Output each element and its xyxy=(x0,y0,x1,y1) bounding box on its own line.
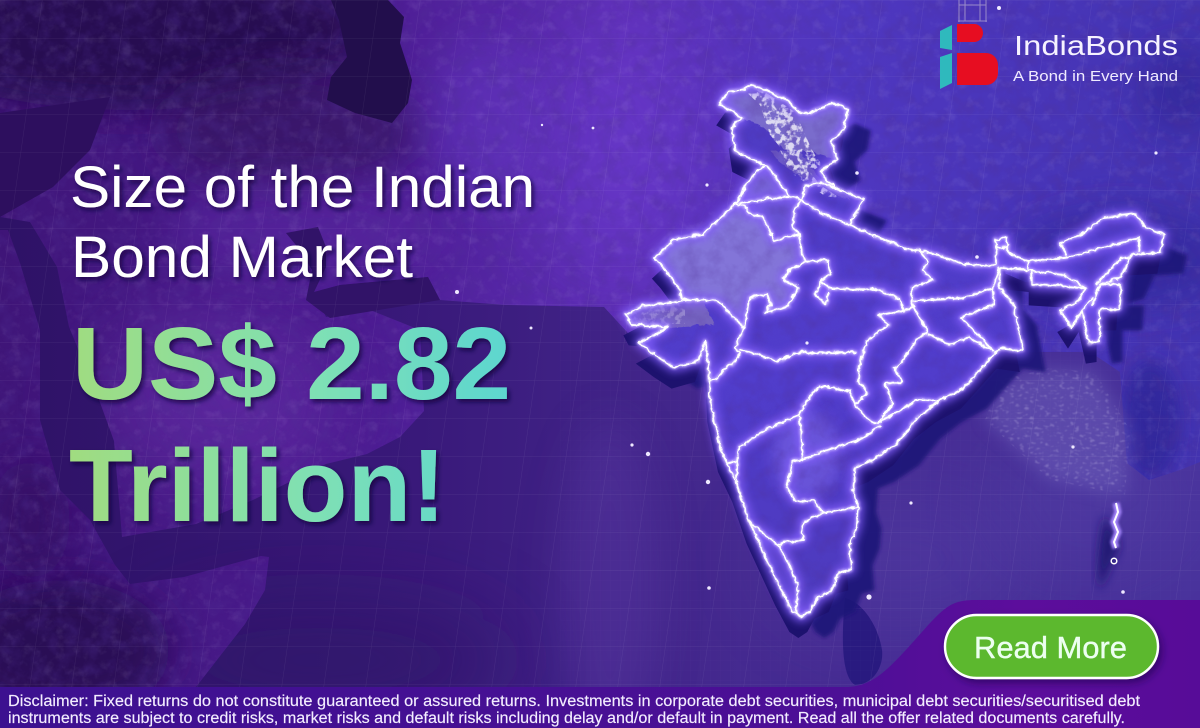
map: land texture xyxy=(632,88,1119,581)
map: India with glowing state borders xyxy=(620,80,1187,638)
map: wide border glow xyxy=(625,84,1163,616)
disclaimer text: Disclaimer: Fixed returns do not constitute guaranteed or assured returns. Investments in corporate debt securities, municipal debt securities/securitised debt xyxy=(8,693,1141,710)
disclaimer text xyxy=(8,693,1141,727)
map: southern plateau highlight xyxy=(772,410,840,497)
map: Kashmir light fill xyxy=(718,84,847,158)
headline figure: US$ 2.82 Trillion!: US$ 2.82 xyxy=(72,306,511,421)
background: Mediterranean Sea xyxy=(0,97,110,217)
background: Caspian Sea xyxy=(327,0,412,123)
map: India land fill xyxy=(625,84,1163,616)
button: Read More xyxy=(945,615,1158,678)
small drone outline above logo xyxy=(958,0,987,22)
background: ocean sheen rings xyxy=(130,420,1180,728)
background: Sri Lanka xyxy=(843,598,882,685)
map: Gujarat fill xyxy=(625,300,713,327)
headline figure: US$ 2.82 Trillion!: Trillion! xyxy=(69,428,446,543)
logo: IndiaBonds xyxy=(940,24,1178,89)
map: Himalaya snow fill xyxy=(770,150,849,198)
logo wordmark: IndiaBonds xyxy=(1014,30,1178,61)
scattered glowing dots xyxy=(455,6,1158,600)
logo tagline: A Bond in Every Hand xyxy=(1013,69,1178,85)
button: Read More: Read More xyxy=(974,630,1127,665)
headline figure: US$ 2.82 Trillion! xyxy=(69,306,511,543)
map: Rajasthan light fill xyxy=(654,203,806,327)
logo icon xyxy=(940,24,998,89)
map: Punjab light fill xyxy=(738,165,788,203)
map: 3D extrusion shadow xyxy=(623,106,1187,638)
disclaimer text: instruments are subject to credit risks, market risks and default risks including delay and/or default in payment. Read all the offer related documents carefully. xyxy=(8,710,1125,727)
map: tight border glow xyxy=(625,84,1163,616)
background: Bay of Bengal sheen xyxy=(985,366,1133,495)
heading: Size of the Indian Bond Market: Bond Market xyxy=(71,225,413,290)
map: border lines xyxy=(625,84,1163,616)
heading: Size of the Indian Bond Market xyxy=(70,155,535,290)
panel: disclaimer band with call-to-action tab xyxy=(0,600,1200,728)
heading: Size of the Indian Bond Market: Size of the Indian xyxy=(70,155,535,220)
background: Persian Gulf xyxy=(286,227,440,318)
map: Andaman and Nicobar islands xyxy=(1098,503,1120,590)
map: Haryana fill xyxy=(747,195,800,240)
